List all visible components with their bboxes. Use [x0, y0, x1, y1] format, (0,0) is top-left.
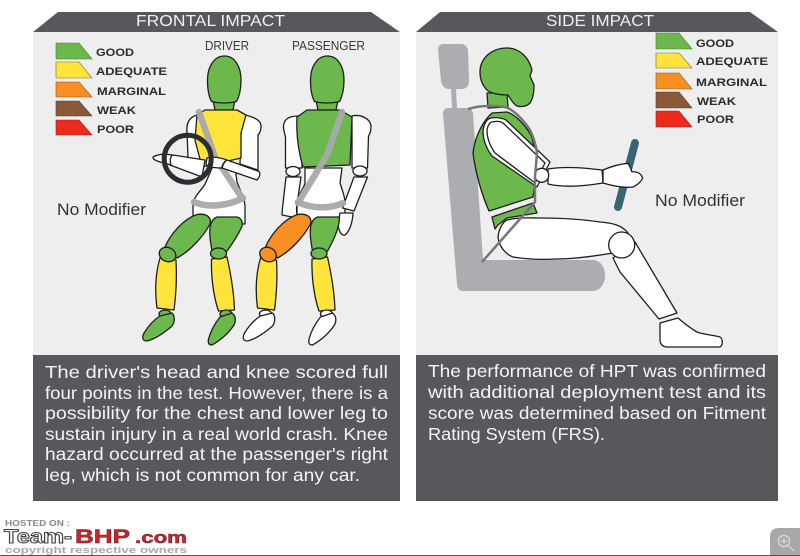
- side torso: [473, 112, 535, 211]
- passenger left thigh, marginal: [266, 214, 311, 258]
- legend: side ratings: MARGINAL: [696, 77, 767, 89]
- text block: frontal description: sustain injury in a real world crash. Knee: [45, 424, 388, 444]
- passenger right arm: [338, 115, 371, 235]
- driver left shin: [156, 258, 176, 310]
- legend: frontal ratings: ADEQUATE: [96, 66, 167, 78]
- driver legs: [143, 214, 242, 345]
- label: driver: DRIVER: [205, 39, 249, 53]
- driver right upper arm: [240, 115, 261, 170]
- side dummy: [473, 48, 722, 347]
- passenger left knee: [257, 245, 279, 264]
- text block: frontal description: four points in the test. However, there is a: [45, 383, 388, 403]
- text block: frontal description: leg, which is not common for any car.: [45, 465, 360, 485]
- driver left foot: [143, 313, 174, 341]
- side panel background: [416, 32, 778, 355]
- passenger seat belt: [298, 112, 343, 207]
- driver left hand: [153, 154, 172, 165]
- side arm outer band: [483, 118, 550, 187]
- text block: frontal description: The driver's head and knee scored full: [45, 362, 388, 382]
- passenger right ankle: [320, 310, 332, 318]
- passenger left elbow: [286, 166, 300, 176]
- driver right knee: [210, 248, 226, 259]
- side shoulder joint: [535, 168, 549, 182]
- legend: side ratings: ADEQUATE: [696, 56, 768, 68]
- legend: side ratings: WEAK: [697, 96, 736, 108]
- watermark copyright: copyright respective owners: [5, 545, 187, 556]
- text block: side description: Rating System (FRS).: [428, 424, 605, 444]
- passenger right knee: [311, 248, 327, 259]
- seat headrest post: [451, 89, 457, 108]
- seat headrest: [438, 44, 469, 89]
- legend: frontal ratings: MARGINAL: [97, 86, 166, 98]
- driver right forearm: [222, 160, 260, 180]
- driver left ankle: [159, 310, 171, 318]
- side shin: [613, 242, 677, 319]
- heading: side impact: SIDE IMPACT: [546, 13, 654, 30]
- label: no modifier side: No Modifier: [655, 192, 746, 210]
- passenger left ankle: [260, 310, 272, 318]
- text block: side description: with additional deployment test and its: [427, 382, 766, 402]
- driver dummy: [143, 56, 261, 345]
- passenger right hand: [338, 213, 353, 235]
- passenger neck: [316, 100, 338, 110]
- heading: frontal impact: FRONTAL IMPACT: [136, 13, 285, 30]
- heading: side impact: [416, 12, 778, 32]
- steering wheel side: [618, 143, 635, 207]
- label: no modifier frontal: No Modifier: [57, 201, 147, 219]
- side head: [480, 48, 534, 107]
- driver right thigh: [210, 217, 242, 251]
- driver torso: [193, 166, 245, 224]
- driver chest: [195, 110, 246, 167]
- legend: side ratings: [656, 33, 768, 127]
- driver right ankle: [220, 310, 232, 318]
- side knee: [609, 232, 635, 258]
- seat back and cushion: [443, 108, 605, 291]
- passenger right elbow: [353, 166, 367, 176]
- side lower torso: [492, 203, 537, 229]
- side foot: [660, 318, 722, 347]
- passenger right foot: [309, 313, 336, 345]
- passenger legs: [243, 214, 340, 345]
- passenger left forearm and hand: [282, 177, 301, 218]
- side seat belt: [468, 106, 537, 262]
- legend: frontal ratings: [56, 43, 167, 136]
- watermark: Team-BHP logo: [4, 518, 187, 556]
- watermark dot com: .com: [135, 528, 187, 547]
- driver right shin: [211, 257, 234, 311]
- driver left knee: [157, 245, 178, 264]
- text block: side description: The performance of HPT was confirmed: [428, 361, 766, 381]
- panel: side impact: [416, 12, 778, 501]
- passenger left foot: [243, 313, 275, 341]
- passenger left arm: [282, 116, 302, 218]
- driver left thigh: [165, 214, 210, 258]
- driver left forearm: [169, 155, 205, 177]
- passenger torso: [297, 168, 345, 224]
- legend: side ratings: GOOD: [696, 38, 734, 50]
- legend: frontal ratings: POOR: [97, 124, 134, 136]
- passenger right forearm: [342, 177, 368, 211]
- car seat: [438, 44, 605, 291]
- frontal panel background: [33, 32, 400, 355]
- side thigh: [498, 218, 628, 259]
- passenger chest: [297, 110, 352, 167]
- driver neck: [213, 100, 235, 110]
- label: passenger: PASSENGER: [292, 39, 365, 53]
- text block: frontal description: possibility for the chest and lower leg to: [45, 403, 388, 423]
- passenger left shoulder and upper arm: [283, 116, 302, 168]
- driver left upper arm: [187, 115, 205, 170]
- text block: frontal description: hazard occurred at the passenger's right: [45, 444, 388, 464]
- driver right hand: [206, 157, 226, 168]
- passenger left shin: [256, 258, 277, 310]
- side hand: [603, 163, 643, 187]
- text block: side description: [416, 355, 778, 501]
- legend: side ratings: POOR: [697, 114, 734, 126]
- driver right foot: [208, 313, 235, 345]
- zoom icon: [770, 528, 800, 555]
- passenger right shoulder and upper arm: [352, 115, 371, 168]
- driver seat belt: [194, 112, 243, 205]
- driver head: [208, 56, 241, 103]
- side neck: [487, 93, 508, 108]
- passenger head: [310, 56, 344, 103]
- text block: side description: score was determined based on Fitment: [428, 403, 766, 423]
- legend: frontal ratings: WEAK: [97, 105, 136, 117]
- text block: frontal description: [33, 355, 400, 501]
- watermark team: Team-: [4, 527, 72, 548]
- watermark hosted on: HOSTED ON :: [5, 518, 70, 528]
- heading: frontal impact: [33, 12, 400, 32]
- driver steering wheel: [164, 135, 211, 182]
- panel: frontal impact: [33, 12, 400, 501]
- legend: frontal ratings: GOOD: [96, 47, 134, 59]
- side forearm: [548, 167, 603, 186]
- passenger right thigh: [310, 217, 340, 251]
- watermark bhp: BHP: [75, 527, 130, 548]
- passenger dummy: [243, 56, 371, 345]
- passenger right shin: [312, 257, 335, 311]
- side upper arm: [487, 121, 545, 183]
